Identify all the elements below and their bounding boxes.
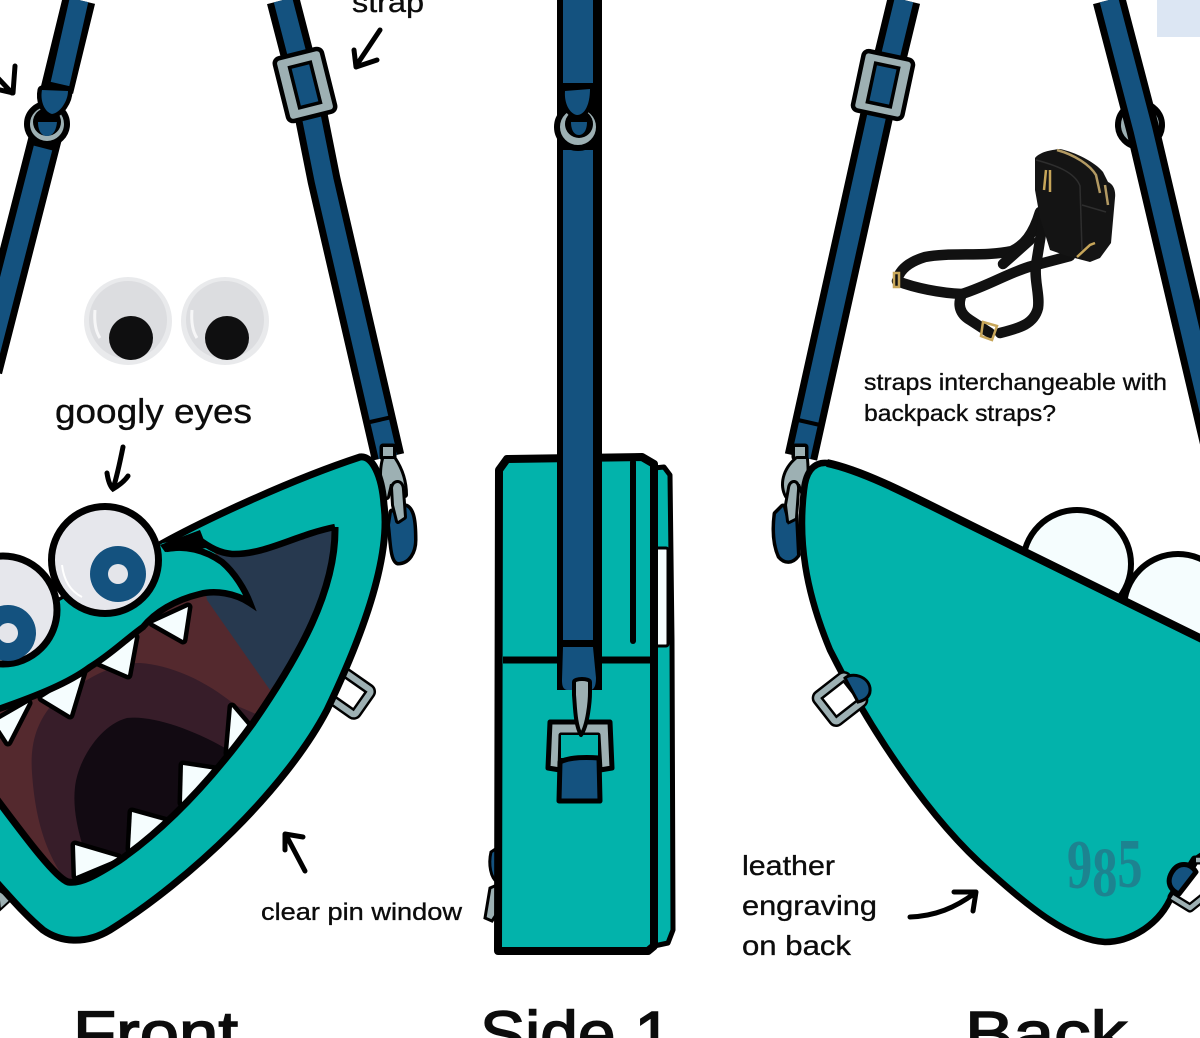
arrow: to strap	[354, 30, 380, 67]
front clasp hardware	[382, 447, 414, 562]
upper lip and snout	[0, 527, 335, 712]
arrow: to eye	[107, 447, 128, 489]
panel: back view of bag	[775, 0, 1200, 942]
thick top edge of back bag	[827, 463, 1200, 643]
bag body, front	[0, 457, 385, 940]
monster eye, right	[52, 506, 158, 614]
backpack gold clasps	[894, 170, 1095, 340]
teeth	[0, 607, 249, 876]
icon: googly eyes reference	[84, 277, 269, 365]
right strap with ring, back	[1109, 0, 1200, 500]
panel: side view of bag	[485, 0, 673, 951]
D-ring, back right	[1169, 860, 1200, 908]
backpack zippers	[1057, 150, 1108, 205]
text: leather engraving label: leather	[742, 850, 835, 881]
lower buckle, side	[548, 679, 612, 801]
monster mouth interior	[0, 531, 332, 879]
outer back panel	[654, 467, 673, 946]
text: leather engraving label: on back	[742, 930, 852, 961]
side D-ring on front bag	[325, 670, 372, 715]
arrow: to pin window	[285, 834, 305, 871]
strap slider buckle, back	[855, 53, 911, 117]
text: googly eyes label: googly eyes	[55, 393, 252, 431]
backpack straps	[897, 212, 1070, 333]
backpack body	[1035, 149, 1115, 262]
back clasp hardware	[775, 447, 807, 560]
left strap, front	[0, 0, 79, 370]
icon: backpack photo	[894, 149, 1115, 340]
seam lines	[503, 656, 652, 664]
panel: light blue corner swatch	[1157, 0, 1200, 37]
text: straps interchangeable note	[864, 369, 1167, 426]
clear window strip	[656, 548, 668, 646]
monster eye, left	[0, 556, 57, 664]
eyes peeking behind bag	[1022, 507, 1200, 634]
backpack seams	[1036, 160, 1106, 250]
text: leather engraving label	[742, 850, 877, 961]
left strap, back	[798, 0, 911, 457]
arrow: to engraving	[910, 892, 976, 917]
bag body, back	[802, 463, 1200, 942]
bottom-left hardware scrap	[0, 890, 12, 910]
leather engraving logo: 985	[1067, 826, 1143, 912]
small hardware on side	[485, 848, 498, 921]
text: clear pin window label: clear pin window	[261, 899, 463, 926]
strap, side	[557, 0, 602, 690]
bag body, side	[498, 457, 654, 951]
panel: front view of bag	[0, 0, 414, 940]
text: straps interchangeable note: straps interchangeable with	[864, 369, 1167, 395]
text: leather engraving label: engraving	[742, 890, 877, 921]
arrow: to ring, top left	[0, 66, 15, 93]
D-ring, back left	[816, 675, 870, 723]
text: straps interchangeable note: backpack straps?	[864, 400, 1056, 426]
strap slider buckle	[276, 51, 334, 119]
right strap, front	[276, 0, 392, 457]
